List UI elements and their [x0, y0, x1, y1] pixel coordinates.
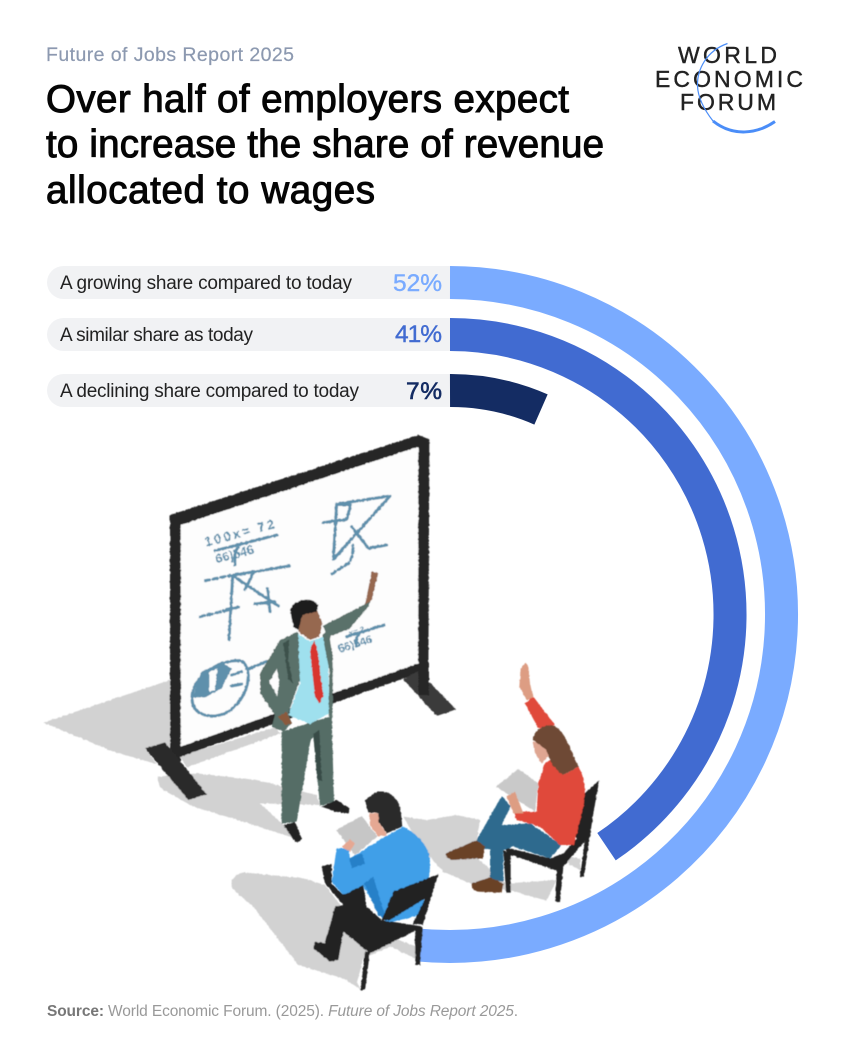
legend row: growing share: 52%: [393, 270, 442, 297]
whiteboard surface: [181, 447, 418, 747]
woman red sweater: [513, 760, 585, 845]
legend row: declining share: [47, 374, 467, 407]
radial bar chart: [418, 282, 782, 946]
student dark trousers: [313, 863, 423, 962]
student cap and hair: [365, 792, 402, 833]
woman raised arm: [519, 663, 533, 700]
presenter hand on hip: [278, 712, 292, 725]
source note: Source: World Economic Forum. (2025). Future of Jobs Report 2025.: [47, 1003, 518, 1020]
woman tablet: [496, 769, 538, 812]
formula text on the whiteboard: [203, 517, 374, 656]
student face: [369, 813, 387, 837]
legend row: similar share: 41%: [395, 321, 442, 348]
logo: World Economic Forum: [655, 42, 803, 132]
shaded part of the ellipse diagram: [192, 663, 232, 697]
presenter trousers: [282, 716, 334, 823]
legend row: similar share: A similar share as today: [60, 325, 254, 346]
illustration: student shadows: [232, 815, 581, 990]
logo: World Economic Forum: WORLD: [678, 42, 777, 68]
header eyebrow: report name: Future of Jobs Report 2025: [46, 44, 294, 66]
title: Over half of employers expect: [46, 78, 569, 121]
student paper: [336, 816, 377, 855]
woman jeans: [477, 796, 562, 882]
title: [46, 78, 604, 212]
legend row: growing share: [47, 266, 467, 299]
presenter face and hair: [298, 611, 322, 640]
illustration: classroom scene: [43, 435, 599, 990]
title: allocated to wages: [46, 169, 375, 212]
arc: 41% similar share: [450, 334, 730, 847]
presenter raised arm: [323, 593, 373, 637]
legend row: similar share: [47, 318, 467, 351]
legend row: growing share: A growing share compared to today: [60, 273, 352, 294]
whiteboard diagrams: [192, 496, 390, 716]
woman boots: [446, 840, 485, 860]
student chair: [361, 874, 438, 990]
illustration: presenter: [260, 572, 378, 842]
presenter shoes: [283, 822, 302, 842]
student blue shirt: [332, 827, 430, 923]
arc: 52% growing share: [418, 282, 782, 946]
logo: World Economic Forum: ECONOMIC: [655, 66, 803, 92]
legend row: declining share: A declining share compared to today: [60, 381, 360, 402]
formula text on the whiteboard: 66)546: [337, 634, 374, 656]
logo: World Economic Forum: FORUM: [680, 89, 776, 115]
whiteboard frame: [170, 435, 429, 773]
illustration: seated woman raising hand: [446, 663, 599, 902]
woman chair: [503, 780, 599, 902]
formula text on the whiteboard: 100x= 72: [203, 517, 276, 550]
legend row: declining share: 7%: [406, 378, 442, 405]
woman face and hair: [533, 742, 548, 763]
title: to increase the share of revenue: [46, 123, 604, 166]
illustration: seated student in blue: [313, 792, 438, 990]
presenter red tie: [310, 641, 323, 703]
illustration: whiteboard feet: [145, 742, 207, 800]
student hand: [342, 839, 355, 852]
presenter jacket: [260, 632, 300, 732]
formula text on the whiteboard: x= 2: [348, 625, 366, 638]
illustration: whiteboard: [170, 435, 429, 773]
illustration: floor shadows of board and presenter: [43, 680, 320, 840]
arc: 7% declining share: [450, 390, 541, 410]
formula text on the whiteboard: 66)546: [214, 543, 256, 566]
presenter shirt: [288, 633, 329, 724]
